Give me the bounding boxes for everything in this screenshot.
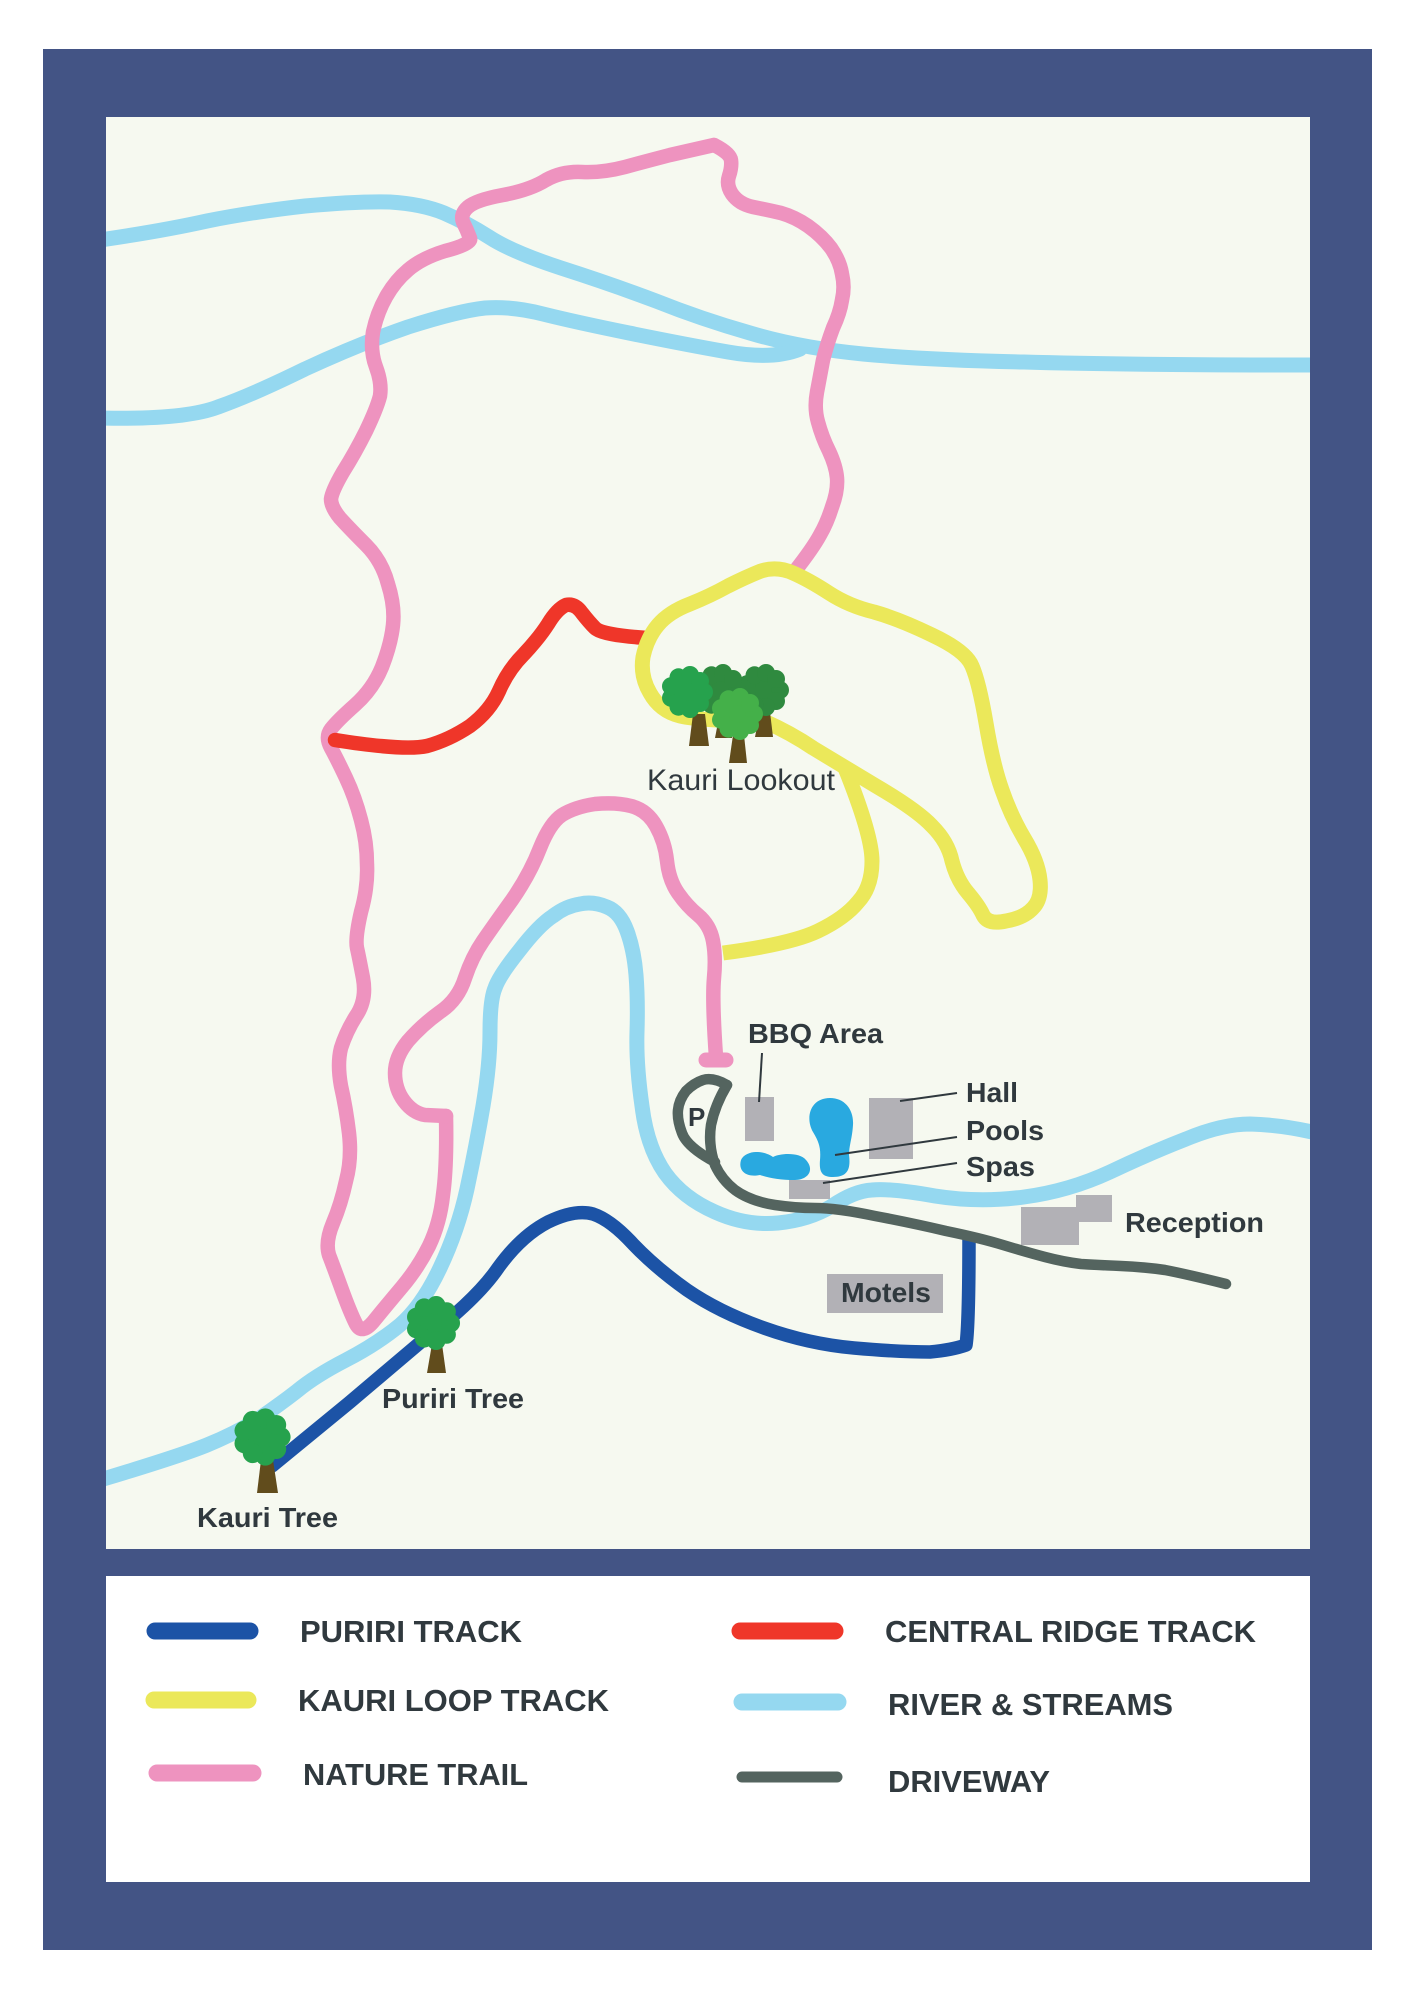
legend background bbox=[106, 1576, 1310, 1882]
pools label and leader bbox=[835, 1115, 1044, 1155]
tree 2 bbox=[695, 664, 746, 738]
legend: central ridge track: CENTRAL RIDGE TRACK bbox=[885, 1614, 1257, 1649]
legend: puriri track: PURIRI TRACK bbox=[300, 1614, 523, 1649]
legend: nature trail: NATURE TRAIL bbox=[303, 1757, 528, 1792]
legend: kauri loop track: KAURI LOOP TRACK bbox=[298, 1683, 610, 1718]
BBQ area label and leader bbox=[748, 1018, 883, 1102]
tree 3 bbox=[738, 664, 789, 737]
legend: driveway: DRIVEWAY bbox=[888, 1764, 1050, 1799]
tree 1 bbox=[662, 666, 713, 746]
panel: map bbox=[100, 117, 1320, 1549]
spas label and leader bbox=[823, 1151, 1035, 1183]
rivers and streams bbox=[100, 202, 1320, 1480]
pools bbox=[740, 1098, 853, 1180]
tree 4 bbox=[712, 688, 763, 763]
BBQ building bbox=[745, 1097, 774, 1141]
motels label bbox=[827, 1274, 943, 1313]
buildings bbox=[745, 1097, 1112, 1245]
large pool bbox=[809, 1098, 853, 1177]
nature trail bbox=[328, 145, 844, 1329]
puriri track bbox=[272, 1213, 969, 1466]
motels label: Motels bbox=[841, 1277, 931, 1308]
reception label: Reception bbox=[1125, 1207, 1264, 1238]
kauri tree label: Kauri Tree bbox=[197, 1502, 338, 1533]
icon: kauri tree bbox=[234, 1408, 291, 1493]
hall label and leader: Hall bbox=[966, 1077, 1018, 1108]
legend: river and streams: RIVER & STREAMS bbox=[888, 1687, 1173, 1722]
panel: legend bbox=[106, 1576, 1310, 1882]
parking label: P bbox=[688, 1102, 705, 1132]
puriri tree label: Puriri Tree bbox=[382, 1383, 524, 1414]
spa building bbox=[789, 1180, 830, 1199]
hall building bbox=[869, 1098, 913, 1159]
small pool bbox=[740, 1152, 810, 1180]
hall label and leader bbox=[900, 1077, 1018, 1108]
pools label and leader: Pools bbox=[966, 1115, 1044, 1146]
kauri loop track bbox=[642, 569, 1040, 953]
spas label and leader: Spas bbox=[966, 1151, 1035, 1182]
map background bbox=[106, 117, 1310, 1549]
icon: puriri tree bbox=[407, 1296, 460, 1373]
kauri lookout label: Kauri Lookout bbox=[647, 764, 836, 797]
central ridge track bbox=[335, 605, 647, 748]
BBQ area label and leader: BBQ Area bbox=[748, 1018, 883, 1049]
driveway bbox=[678, 1079, 1226, 1284]
icon: kauri lookout trees bbox=[662, 664, 789, 763]
reception building bbox=[1021, 1195, 1112, 1245]
